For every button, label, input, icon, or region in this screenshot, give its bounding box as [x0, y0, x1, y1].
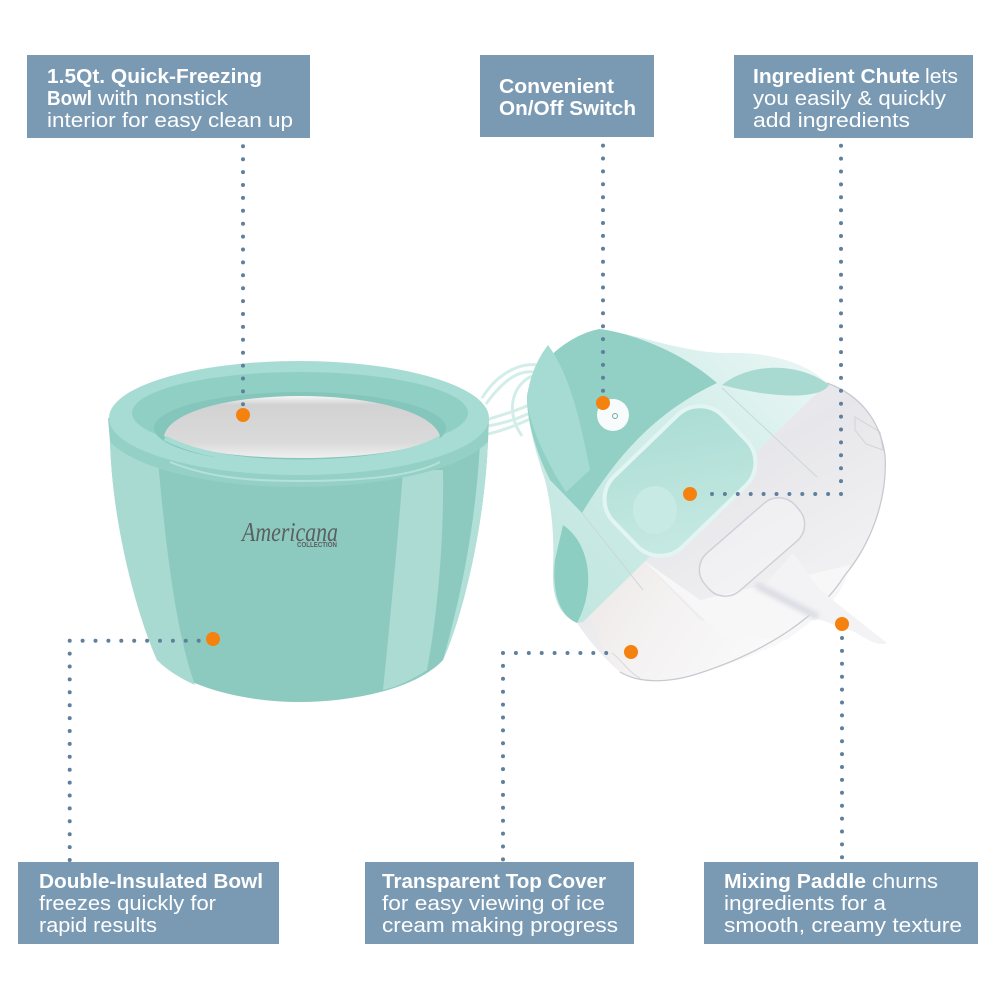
bowl silver interior [164, 396, 440, 458]
callout: mixing paddle [704, 862, 978, 944]
callout: double-insulated bowl: Double-Insulated Bowl [39, 870, 263, 893]
logo: Americana Collection: Americana [240, 517, 338, 547]
on/off switch [597, 399, 629, 431]
callout: transparent top cover [365, 862, 634, 944]
callout: quick-freezing bowl: interior for easy clean up [47, 109, 293, 132]
callout: ingredient chute: you easily & quickly [753, 87, 947, 110]
callout: double-insulated bowl: rapid results [39, 914, 157, 937]
bowl lower rim band [108, 418, 489, 487]
callout: quick-freezing bowl: with nonstick [97, 87, 229, 110]
bowl rim [109, 361, 489, 475]
icon: power cords [482, 365, 548, 436]
lid solid green top [527, 329, 717, 513]
chute window [591, 393, 769, 569]
bowl right edge highlight [443, 440, 488, 660]
callout: transparent top cover: Transparent Top Cover [382, 870, 606, 893]
callout: mixing paddle: smooth, creamy texture [724, 914, 962, 937]
callout: mixing paddle: churns [872, 870, 938, 893]
callout: mixing paddle: Mixing Paddle [724, 870, 866, 893]
callout: on/off switch: Convenient [499, 75, 614, 98]
leader lines [70, 143, 842, 862]
callout: transparent top cover: for easy viewing of ice [382, 892, 605, 915]
callout: quick-freezing bowl: 1.5Qt. Quick-Freezing [47, 65, 262, 88]
panel seam lines [582, 388, 817, 590]
lid clear shell [527, 329, 885, 681]
callout: ingredient chute: add ingredients [753, 109, 910, 132]
freezing bowl [108, 361, 489, 702]
lid lower clear area [590, 560, 785, 681]
lid back handle [722, 368, 829, 396]
mixer lid [527, 329, 887, 681]
callout: transparent top cover: cream making progress [382, 914, 618, 937]
callout: double-insulated bowl [18, 862, 279, 944]
bowl body [110, 440, 488, 702]
callout: on/off switch [480, 55, 654, 137]
callout: quick-freezing bowl: Bowl [47, 87, 92, 110]
bowl left highlight [110, 440, 195, 685]
callout: double-insulated bowl: freezes quickly for [39, 892, 216, 915]
callout: ingredient chute: Ingredient Chute [753, 65, 920, 88]
lid left side grip [554, 525, 588, 623]
logo: Americana Collection: COLLECTION [297, 542, 337, 549]
orange markers [206, 396, 849, 659]
lid lower latch [612, 653, 640, 678]
lid mint tint [527, 329, 827, 623]
outline of clear shell [620, 383, 885, 681]
lid right latch [855, 417, 883, 450]
callout: ingredient chute: lets [925, 65, 958, 88]
callout: on/off switch: On/Off Switch [499, 97, 636, 120]
callout: quick-freezing bowl [27, 55, 310, 138]
callout: ingredient chute [734, 55, 973, 138]
callout: mixing paddle: ingredients for a [724, 892, 887, 915]
mixing paddle [690, 489, 887, 644]
bowl right highlight [383, 470, 443, 690]
